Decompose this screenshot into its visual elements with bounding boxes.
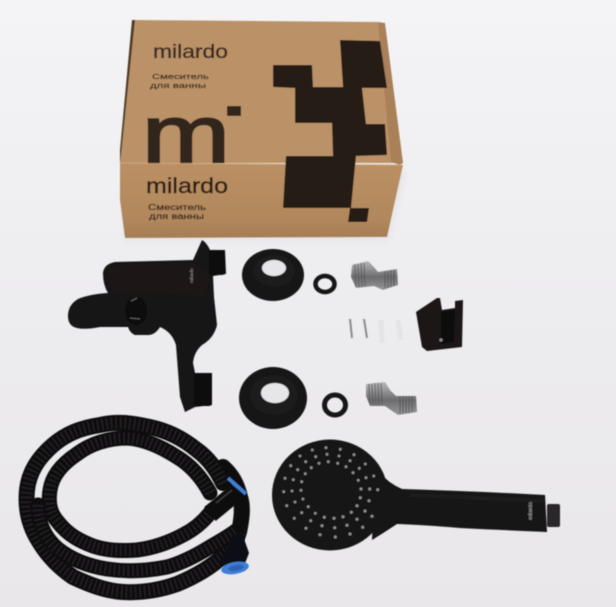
faucet body — [68, 240, 226, 412]
blue cap upper — [228, 478, 246, 494]
hose end sleeve with blue cap — [210, 478, 246, 514]
box left flap — [120, 20, 135, 165]
box side flap — [378, 22, 403, 165]
upper rubber o-ring — [316, 276, 334, 292]
shower nozzles — [282, 446, 379, 538]
box top panel — [120, 20, 403, 163]
box pattern small square — [348, 208, 369, 222]
upper flange hole — [262, 260, 286, 276]
lower wall flange — [239, 367, 307, 429]
lower rubber o-ring — [324, 395, 346, 415]
shower handle logo: milardo — [528, 502, 534, 520]
holder inner recess — [441, 310, 455, 344]
faucet logo: milardo — [189, 268, 194, 283]
box black pixel pattern — [273, 40, 387, 208]
upper wall flange — [242, 249, 304, 301]
faucet spout highlight — [72, 297, 126, 325]
hose conical nut — [220, 530, 250, 576]
translucent wall plugs — [381, 320, 401, 343]
shower head disc — [272, 440, 388, 550]
braided shower hose — [27, 423, 242, 592]
product name on front: Смеситель — [148, 203, 206, 212]
screws and wall plugs — [350, 319, 401, 343]
lower connector thread — [369, 383, 412, 414]
hose loop outer — [27, 423, 242, 592]
brand name on lid: milardo — [153, 42, 228, 63]
brand name on front: milardo — [146, 175, 228, 198]
cardboard box — [120, 20, 405, 240]
faucet knob marks — [130, 298, 140, 319]
shower handle — [372, 466, 547, 540]
product name second line on front: для ванны — [149, 212, 204, 221]
blue cap lower centre — [228, 564, 244, 572]
hose holder bracket — [416, 298, 463, 351]
shower handle highlight — [410, 493, 544, 503]
shower end nipple — [547, 504, 560, 527]
faucet top nut — [209, 250, 225, 275]
hose loop inner — [49, 438, 210, 551]
lower flange cone — [250, 375, 298, 415]
faucet bottom nut — [194, 373, 212, 406]
hose loop lower — [38, 505, 237, 571]
product name on lid: Смеситель — [152, 72, 209, 81]
upper steel connector — [351, 261, 398, 290]
lower flange hole — [261, 383, 289, 403]
box front panel — [120, 163, 403, 238]
product name second line on lid: для ванны — [150, 81, 206, 90]
box fold highlight — [120, 163, 401, 165]
blue cap lower — [220, 560, 250, 576]
large m logo: m — [142, 90, 230, 180]
faucet diverter knob — [125, 297, 147, 325]
holder screw hole — [439, 338, 443, 342]
sleeve highlight — [216, 490, 232, 503]
upper flange cone — [253, 255, 295, 287]
upper connector thread — [355, 263, 394, 288]
faucet upper lever highlight — [108, 262, 210, 296]
lower steel connector — [366, 382, 417, 415]
hand shower — [272, 440, 560, 550]
logo dot — [227, 106, 241, 116]
